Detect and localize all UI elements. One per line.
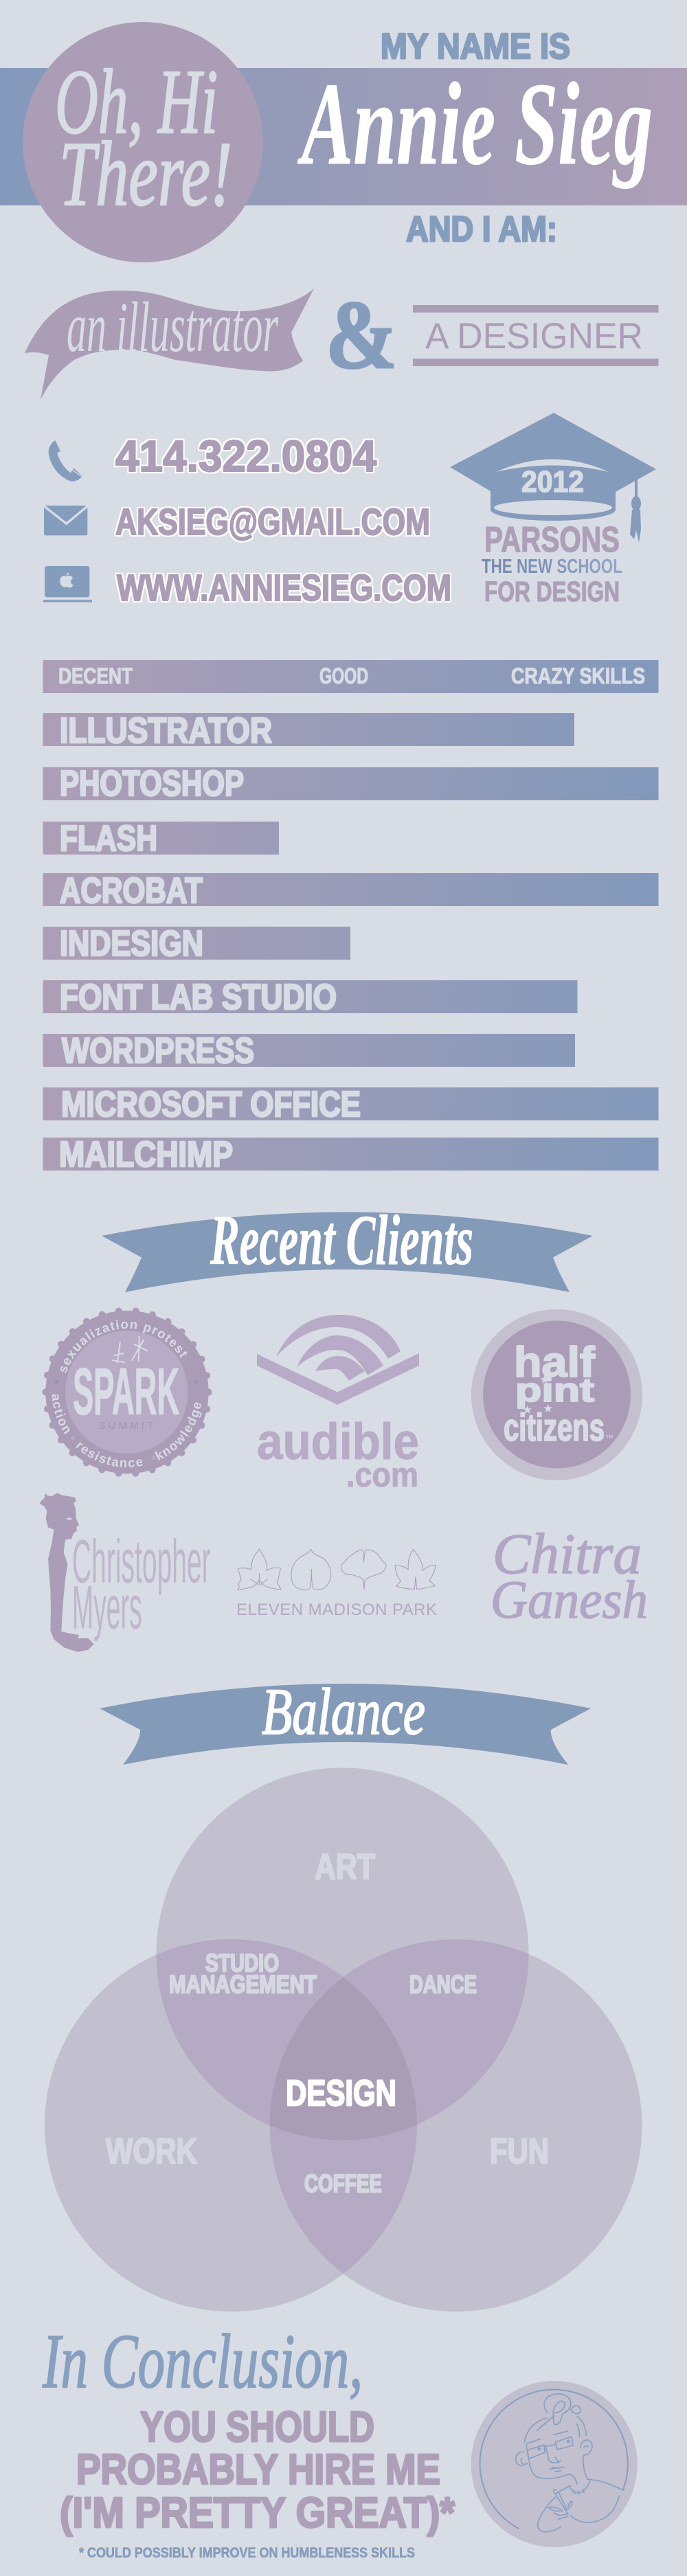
greeting text: Oh, Hi — [55, 51, 218, 152]
contact icons — [43, 440, 92, 602]
half pint stars: ★ — [543, 1402, 553, 1416]
client logo: Eleven Madison Park — [236, 1549, 437, 1619]
website: WWW.ANNIESIEG.COM — [117, 567, 451, 609]
in conclusion heading: In Conclusion, — [42, 2319, 363, 2404]
hire me message: (I'M PRETTY GREAT)* — [60, 2489, 455, 2537]
icon: graduation cap — [450, 413, 656, 543]
roles row — [25, 280, 658, 400]
bar: acrobat: ACROBAT — [60, 871, 203, 911]
figure eye — [67, 1518, 72, 1519]
ribbon: recent clients — [102, 1201, 593, 1292]
portrait medallion — [471, 2381, 638, 2547]
contact details — [115, 431, 451, 609]
scale header bar: DECENT — [58, 664, 133, 688]
scale header bar: CRAZY SKILLS — [511, 664, 645, 688]
parsons text: PARSONS — [484, 520, 620, 560]
half pint wordmark: half — [514, 1339, 595, 1386]
venn label: coffee: COFFEE — [304, 2169, 382, 2197]
half pint stars: ★ — [522, 1403, 532, 1417]
greeting text: There! — [59, 123, 232, 225]
phone number: 414.322.0804 — [115, 431, 376, 481]
venn diagram — [45, 1768, 642, 2312]
audible dot com: .com — [346, 1456, 418, 1494]
bar: mailchimp — [43, 1135, 658, 1175]
bar: indesign: INDESIGN — [60, 924, 203, 964]
bar: mailchimp: MAILCHIMP — [59, 1135, 233, 1175]
conclusion section — [42, 2319, 455, 2561]
designer block — [413, 305, 658, 366]
illustrator ribbon — [25, 288, 314, 400]
christopher myers name: Myers — [72, 1573, 142, 1642]
text: Christopher — [72, 1526, 211, 1595]
client logo: Half Pint Citizens — [471, 1309, 642, 1480]
bar: flash: FLASH — [60, 819, 157, 859]
hire me message — [60, 2404, 455, 2537]
venn label: studio management — [169, 1949, 317, 1998]
half pint stars: ★ — [539, 1373, 550, 1387]
venn label: design: DESIGN — [286, 2073, 396, 2114]
icon: envelope — [43, 506, 89, 535]
email: AKSIEG@GMAIL.COM — [115, 501, 430, 543]
icon: laptop — [43, 566, 92, 602]
for design text: FOR DESIGN — [484, 576, 620, 607]
bar: illustrator — [43, 711, 574, 751]
client logo: Spark Summit: action resistance knowledge — [52, 1394, 202, 1467]
christopher myers name — [72, 1526, 211, 1642]
half pint wordmark — [504, 1339, 605, 1449]
client logo: Spark Summit — [42, 1308, 212, 1477]
ampersand: & — [326, 280, 397, 389]
gradient name band — [0, 68, 687, 205]
greeting text — [55, 51, 232, 225]
hire me message: PROBABLY HIRE ME — [76, 2446, 440, 2494]
year: 2012 — [521, 465, 584, 499]
and I am heading: AND I AM: — [406, 210, 557, 249]
bar: flash — [43, 819, 279, 859]
scale header bar — [43, 660, 658, 693]
recent clients heading: Recent Clients — [210, 1201, 473, 1280]
audible wordmark: audible — [257, 1413, 419, 1470]
audible book mark — [257, 1315, 419, 1405]
bar: font lab studio: FONT LAB STUDIO — [60, 978, 337, 1017]
balance heading: Balance — [262, 1675, 425, 1748]
client logo: Audible — [257, 1315, 419, 1494]
half pint wordmark: citizens — [504, 1405, 605, 1449]
header section — [0, 22, 687, 262]
venn label: studio management: STUDIO — [205, 1949, 279, 1977]
bar: photoshop: PHOTOSHOP — [60, 764, 244, 804]
Parsons graduation block — [450, 413, 656, 607]
venn label: work: WORK — [106, 2132, 197, 2171]
client logo: Christopher Myers — [39, 1493, 211, 1652]
ribbon: balance — [100, 1675, 591, 1765]
icon: phone — [49, 440, 82, 482]
venn label: studio management: MANAGEMENT — [169, 1970, 317, 1998]
venn circles — [45, 1768, 642, 2312]
venn label: fun: FUN — [490, 2132, 549, 2171]
bar: microsoft office — [43, 1085, 658, 1125]
client logo: Chitra Ganesh: Ganesh — [491, 1570, 648, 1629]
bar: wordpress: WORDPRESS — [62, 1031, 254, 1071]
half pint wordmark: pint — [515, 1372, 594, 1409]
client logo: Spark Summit: SPARK — [73, 1355, 179, 1428]
designer text: A DESIGNER — [425, 316, 643, 357]
bar: photoshop — [43, 764, 658, 804]
client logo: Chitra Ganesh: Chitra — [493, 1522, 642, 1586]
new school text: THE NEW SCHOOL — [482, 556, 622, 578]
figure silhouette — [39, 1493, 94, 1652]
bar: acrobat — [43, 871, 658, 911]
skills chart — [43, 660, 658, 1175]
my name is heading: MY NAME IS — [381, 27, 570, 67]
greeting circle — [23, 22, 263, 262]
half pint stars — [522, 1373, 613, 1440]
client logo: Spark Summit: SUMMIT — [98, 1421, 153, 1432]
venn label: dance: DANCE — [409, 1970, 477, 1998]
client logo: Chitra Ganesh — [491, 1522, 648, 1629]
bar: microsoft office: MICROSOFT OFFICE — [61, 1085, 361, 1125]
bar: indesign — [43, 924, 350, 964]
venn label: art: ART — [315, 1847, 375, 1887]
footnote: * COULD POSSIBLY IMPROVE ON HUMBLENESS SKILLS — [79, 2545, 415, 2561]
bar: font lab studio — [43, 978, 577, 1017]
eleven madison park text: ELEVEN MADISON PARK — [236, 1601, 437, 1619]
scale header bar: GOOD — [319, 664, 368, 688]
client logo: Spark Summit: sexualization protest — [60, 1320, 187, 1372]
illustrator text: an illustrator — [67, 288, 278, 367]
bar: illustrator: ILLUSTRATOR — [60, 711, 272, 751]
portrait ring — [480, 2390, 628, 2529]
bar: wordpress — [43, 1031, 575, 1071]
portrait drawing — [516, 2394, 623, 2532]
half pint stars: TM — [605, 1434, 613, 1440]
four leaves — [238, 1549, 436, 1590]
hire me message: YOU SHOULD — [140, 2404, 374, 2451]
